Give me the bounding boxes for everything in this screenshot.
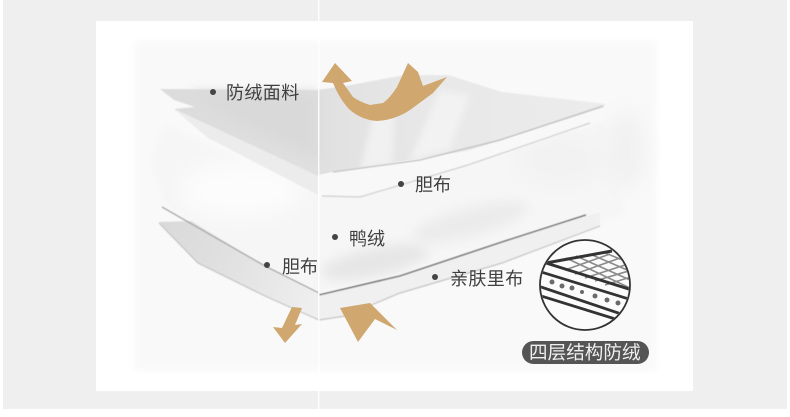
vertical seam line — [318, 0, 320, 409]
icon: magnified fabric layers — [538, 240, 634, 330]
badge: 四层结构防绒: 四层结构防绒 — [529, 342, 641, 363]
mesh top layer — [565, 252, 634, 288]
bottom lining layer — [159, 207, 600, 320]
label: 胆布 upper — [398, 175, 451, 195]
label: 胆布 upper: 胆布 — [415, 175, 451, 195]
illustration: four-layer quilt cross-section — [150, 75, 645, 320]
duck down filling — [150, 120, 625, 293]
label: 鸭绒: 鸭绒 — [349, 229, 385, 249]
white frame panel — [96, 21, 693, 391]
top fabric layer — [160, 75, 606, 195]
upper lining strip — [319, 108, 603, 197]
label: 鸭绒 — [332, 229, 385, 249]
arrow: curved airflow — [322, 63, 447, 121]
label: 亲肤里布: 亲肤里布 — [450, 269, 524, 289]
label: 胆布 lower: 胆布 — [282, 257, 318, 277]
arrow: up-right — [340, 303, 397, 342]
label: 胆布 lower — [264, 257, 318, 277]
label: 防绒面料: 防绒面料 — [226, 83, 300, 103]
inner product panel — [134, 41, 657, 371]
arrow: down-left — [273, 307, 302, 343]
